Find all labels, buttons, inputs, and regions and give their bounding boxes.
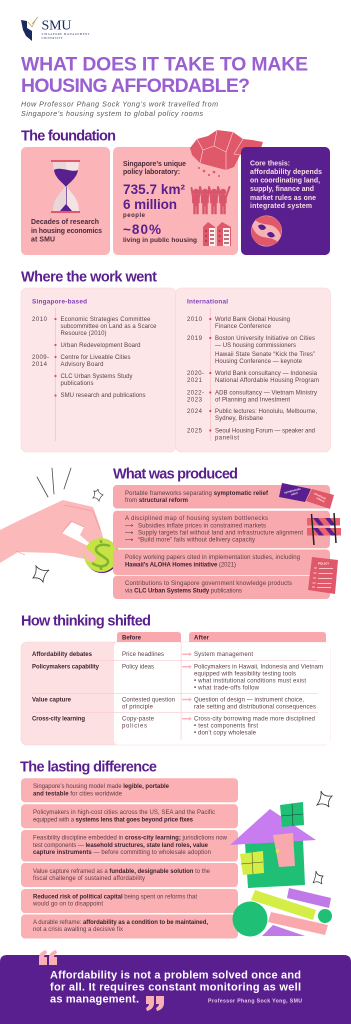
timeline: Singapore: 2014: [32, 362, 48, 368]
heading: where the work went: Where the work went: [21, 270, 157, 286]
illustration: hand holding coin: [0, 468, 119, 582]
row: cross-city learning: Cross-city learning: [32, 716, 85, 722]
item: political capital: [21, 889, 238, 913]
item: portable frameworks: from structural reform: [125, 498, 188, 504]
timeline: International: ADB consultancy — Vietnam Ministry: [215, 390, 317, 396]
quote text: for all. It requires constant monitoring as well: [50, 982, 301, 994]
timeline: Singapore: SMU research and publications: [60, 393, 146, 399]
timeline: Singapore: Urban Redevelopment Board: [60, 343, 140, 349]
stat: area: 735.7 km²: [123, 182, 186, 197]
item: systems lens: Policymakers in high-cost cities across the US, SEA and the Pacific: [33, 810, 215, 816]
row: policymakers capability: Policymakers capability: [32, 664, 100, 670]
item: political capital: Reduced risk of political capital being spent on reforms that: [33, 894, 197, 900]
panel: International: [176, 288, 330, 452]
logo: SMU: UNIVERSITY: [42, 37, 62, 40]
item: bottlenecks: Supply targets fail without land and infrastructure alignment: [138, 530, 303, 536]
row: policymakers capability: equipped with feasibility testing tools: [194, 672, 296, 678]
attribution: Professor Phang Sock Yong, SMU: [208, 998, 302, 1004]
item: feasibility discipline: Feasibility discipline embedded in cross-city learning; jurisdictions now: [33, 836, 228, 842]
logo: SMU: SMU: [42, 18, 72, 34]
text: policy laboratory label: policy laboratory:: [123, 169, 180, 176]
item: value capture: Value capture reframed as a fundable, designable solution to the: [33, 869, 211, 875]
text: decades of research: at SMU: [31, 236, 55, 244]
text: policy laboratory label: [123, 161, 186, 176]
timeline: International: Seoul Housing Forum — speaker and: [215, 428, 315, 434]
row: cross-city learning: Cross-city borrowing made more disciplined: [194, 716, 315, 722]
item: political capital: would go on to disappoint: [32, 902, 103, 908]
item: bottlenecks: A disciplined map of housing system bottlenecks: [125, 516, 268, 522]
text: core thesis: Core thesis:: [250, 160, 290, 168]
subtitle: Singapore’s housing system to global policy rooms: [21, 110, 203, 118]
timeline: International: 2023: [187, 398, 203, 404]
row: cross-city learning: policies: [122, 724, 147, 730]
subtitle: [21, 100, 218, 118]
timeline: International: Hawaii State Senate “Kick the Tires”: [215, 352, 315, 358]
icon: hourglass: [51, 160, 80, 213]
row: affordability debates: System management: [194, 652, 253, 658]
item: bottlenecks: [113, 511, 330, 548]
row: cross-city learning: • don’t copy wholesale: [194, 730, 257, 736]
icon: torn tickets: structural: [313, 491, 327, 501]
row: cross-city learning: • test components first: [194, 724, 258, 730]
timeline: International: Finance Conference: [215, 324, 272, 330]
icon: policy document: [308, 557, 338, 594]
heading: how thinking shifted: How thinking shifted: [21, 614, 151, 630]
label: Singapore-based: Singapore-based: [32, 299, 87, 306]
title: [21, 54, 308, 97]
icon: closing quote mark: [146, 996, 164, 1011]
tab: before: [117, 632, 181, 642]
timeline: International: — US housing commissioners: [215, 343, 296, 349]
item: bottlenecks: Subsidies inflate prices in constrained markets: [138, 523, 266, 529]
timeline: International: of Planning and Investment: [215, 398, 290, 404]
heading: the foundation: The foundation: [21, 129, 116, 145]
timeline: Singapore: [32, 308, 157, 441]
text: core thesis: affordability depends: [250, 169, 322, 176]
timeline: International: Public lectures: Honolulu, Melbourne,: [215, 409, 317, 415]
timeline: Singapore: Resource (2010): [60, 331, 106, 337]
timeline: International: Housing Conference — keynote: [215, 359, 303, 365]
illustration: house and blocks: [230, 791, 332, 936]
icon: interlocking loop: [251, 216, 282, 246]
timeline: International: 2025: [187, 428, 203, 434]
logo: SMU: [21, 17, 90, 41]
row: cross-city learning: [32, 716, 315, 736]
quote text: [50, 969, 301, 1006]
item: legible model: and testable for cities worldwide: [33, 792, 123, 798]
timeline: International: 2022-: [187, 390, 204, 396]
item: legible model: [21, 778, 238, 802]
row: cross-city learning: Copy-paste: [122, 716, 155, 722]
item: durable reframe: [21, 914, 238, 938]
item: value capture: fiscal challenge of sustained affordability: [33, 876, 145, 882]
panel: quote: [0, 950, 351, 1024]
label: International: International: [187, 299, 228, 306]
timeline: International: 2024: [187, 409, 203, 415]
timeline: International: National Affordable Housing Program: [215, 378, 319, 384]
text: decades of research: [31, 219, 102, 244]
item: durable reframe: not a crisis awaiting a decisive fix: [33, 927, 123, 933]
icon: housing blocks: [203, 222, 231, 246]
quote text: Affordability is not a problem solved once and: [50, 969, 301, 981]
row: value capture: Contested question: [122, 697, 175, 703]
item: systems lens: equipped with a systems lens that goes beyond price fixes: [33, 817, 194, 823]
panel: policy laboratory: [113, 130, 263, 255]
heading: the lasting difference: The lasting difference: [20, 760, 157, 776]
panel: what was produced list: [113, 485, 330, 599]
timeline: International: Sydney, Brisbane: [215, 416, 264, 422]
timeline: Singapore: subcommittee on Land as a Scarce: [60, 324, 157, 330]
item: working papers: [113, 550, 330, 575]
item: value capture: [21, 863, 238, 887]
text: decades of research: in housing economics: [31, 228, 102, 235]
item: knowledge products: [113, 576, 330, 599]
stat: public housing: living in public housing: [123, 237, 197, 244]
icon: Singapore map: [190, 130, 263, 177]
stat: public housing: ~80%: [123, 222, 161, 237]
heading: what was produced: What was produced: [113, 466, 238, 482]
text: core thesis: on coordinating land,: [250, 178, 320, 184]
row: value capture: Question of design — instrument choice,: [194, 697, 304, 703]
stat: population: [123, 197, 177, 219]
icon: barricade: [307, 513, 341, 545]
timeline: Singapore: 2010: [32, 317, 48, 323]
stat: public housing: [123, 222, 197, 244]
timeline: Singapore: publications: [60, 381, 94, 387]
item: working papers: Policy working papers cited in implementation studies, including: [125, 555, 300, 561]
item: knowledge products: Contributions to Singapore government knowledge products: [125, 581, 292, 587]
stat: population: 6 million: [123, 197, 177, 212]
tab: before: Before: [122, 636, 142, 642]
item: feasibility discipline: [21, 830, 238, 862]
timeline: International: 2010: [187, 317, 203, 323]
icon: policy document: POLICY: [318, 562, 329, 566]
text: core thesis: market rules as one: [250, 195, 316, 202]
row: value capture: rate setting and distributional consequences: [194, 704, 316, 710]
timeline: International: [187, 308, 319, 442]
timeline: International: 2021: [187, 378, 203, 384]
item: bottlenecks: “Build more” fails without delivery capacity: [138, 538, 255, 544]
timeline: Singapore: 2009-: [32, 355, 49, 361]
stat: population: people: [123, 213, 146, 219]
text: policy laboratory label: Singapore’s unique: [123, 161, 186, 168]
row: policymakers capability: • what institutional conditions must exist: [194, 678, 306, 684]
row: policymakers capability: • what trade-offs follow: [194, 686, 260, 692]
text: decades of research: Decades of research: [31, 219, 99, 226]
item: working papers: Hawaii’s ALOHA Homes initiative (2021): [125, 562, 236, 568]
row: affordability debates: [32, 652, 253, 658]
row: policymakers capability: Policymakers in Hawaii, Indonesia and Vietnam: [194, 664, 323, 670]
timeline: International: 2020-: [187, 371, 204, 377]
row: value capture: of principle: [122, 704, 154, 710]
icon: coin: [84, 538, 119, 573]
icon: torn tickets: reform: [316, 496, 326, 504]
item: feasibility discipline: test components — leasehold structures, state land roles, value: [33, 843, 209, 849]
logo: SMU: SINGAPORE MANAGEMENT: [42, 33, 90, 36]
item: systems lens: [21, 804, 238, 828]
panel: decades of research: [21, 147, 110, 255]
title: WHAT DOES IT TAKE TO MAKE: [21, 54, 308, 76]
item: legible model: Singapore’s housing model made legible, portable: [33, 784, 170, 790]
table: before and after: [21, 632, 330, 745]
timeline: Singapore: CLC Urban Systems Study: [60, 374, 132, 380]
icon: people: [192, 187, 230, 214]
tab: after: [189, 632, 326, 642]
row: affordability debates: Price headlines: [122, 652, 164, 658]
icon: opening quote mark: [39, 950, 57, 965]
row: policymakers capability: [32, 664, 323, 692]
item: portable frameworks: [113, 485, 330, 508]
timeline: International: World Bank Global Housing: [215, 317, 290, 323]
icon: torn tickets: symptomatic: [284, 486, 302, 495]
panel: core thesis: [241, 147, 330, 255]
item: feasibility discipline: capture instruments — before committing to wholesale adoption: [33, 850, 211, 856]
item: portable frameworks: Portable frameworks separating symptomatic relief: [125, 491, 269, 497]
tab: after: After: [194, 636, 210, 642]
icon: torn tickets: relief: [291, 491, 298, 496]
timeline: International: panelist: [215, 436, 239, 442]
row: value capture: Value capture: [32, 697, 72, 703]
text: core thesis: integrated system: [250, 203, 312, 210]
quote text: as management.: [50, 994, 139, 1006]
timeline: Singapore: Advisory Board: [60, 362, 104, 368]
timeline: Singapore: Economic Strategies Committee: [60, 317, 151, 323]
item: knowledge products: via CLC Urban Systems Study publications: [125, 588, 242, 594]
panel: lasting difference list: [21, 778, 238, 938]
timeline: International: 2019: [187, 336, 203, 342]
text: core thesis: supply, finance and: [250, 186, 314, 193]
row: value capture: [32, 697, 316, 710]
timeline: International: World Bank consultancy — Indonesia: [215, 371, 318, 377]
timeline: International: Boston University Initiative on Cities: [215, 336, 315, 342]
timeline: Singapore: Centre for Liveable Cities: [60, 355, 130, 361]
panel: Singapore-based: [21, 288, 176, 452]
row: affordability debates: Affordability debates: [32, 652, 93, 658]
subtitle: How Professor Phang Sock Yong’s work travelled from: [21, 100, 218, 108]
item: durable reframe: A durable reframe: affordability as a condition to be maintained,: [33, 920, 208, 926]
row: policymakers capability: Policy ideas: [122, 664, 154, 670]
title: HOUSING AFFORDABLE?: [21, 75, 250, 97]
icon: torn tickets: [279, 483, 334, 509]
text: core thesis: [250, 160, 322, 210]
